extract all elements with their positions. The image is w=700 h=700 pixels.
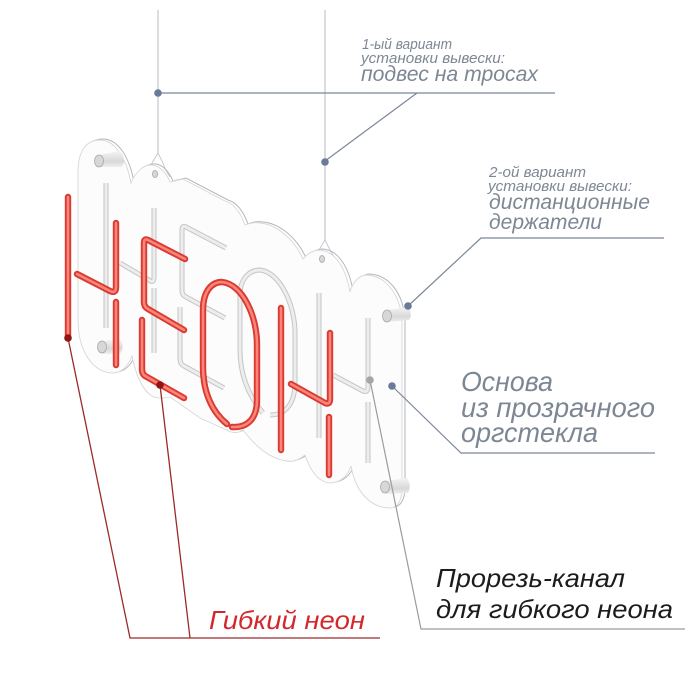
hanging cables bbox=[151, 10, 337, 262]
callout: standoff holders: дистанционные bbox=[489, 190, 650, 214]
acrylic back edge bbox=[81, 139, 405, 507]
callout: transparent acrylic base: оргстекла bbox=[461, 417, 598, 448]
callout: hanging cables: подвес на тросах bbox=[361, 62, 539, 86]
callout: hanging cables: установки вывески: bbox=[360, 51, 505, 67]
callout: slot channel: для гибкого неона bbox=[436, 594, 673, 624]
standoff holders bbox=[99, 151, 411, 494]
screws bbox=[94, 155, 392, 493]
callout: standoff holders bbox=[404, 165, 664, 310]
callout: transparent acrylic base: Основа bbox=[461, 366, 553, 397]
flexible neon letters bbox=[68, 197, 330, 475]
callout: hanging cables: 1-ый вариант bbox=[362, 37, 452, 53]
callout: standoff holders: 2-ой вариант bbox=[488, 165, 586, 181]
callout: standoff holders: держатели bbox=[489, 210, 602, 234]
callout: flexible neon bbox=[64, 334, 380, 638]
slot channels for neon bbox=[106, 183, 368, 463]
callout: slot channel: Прорезь-канал bbox=[436, 563, 625, 593]
callout: standoff holders: установки вывески: bbox=[487, 179, 632, 195]
callout: hanging cables bbox=[154, 37, 555, 166]
callout: flexible neon: Гибкий неон bbox=[209, 605, 365, 635]
callout: transparent acrylic base bbox=[388, 366, 655, 453]
callout: transparent acrylic base: из прозрачного bbox=[461, 392, 655, 423]
callout: slot channel bbox=[366, 376, 685, 629]
acrylic base plate bbox=[78, 140, 402, 508]
